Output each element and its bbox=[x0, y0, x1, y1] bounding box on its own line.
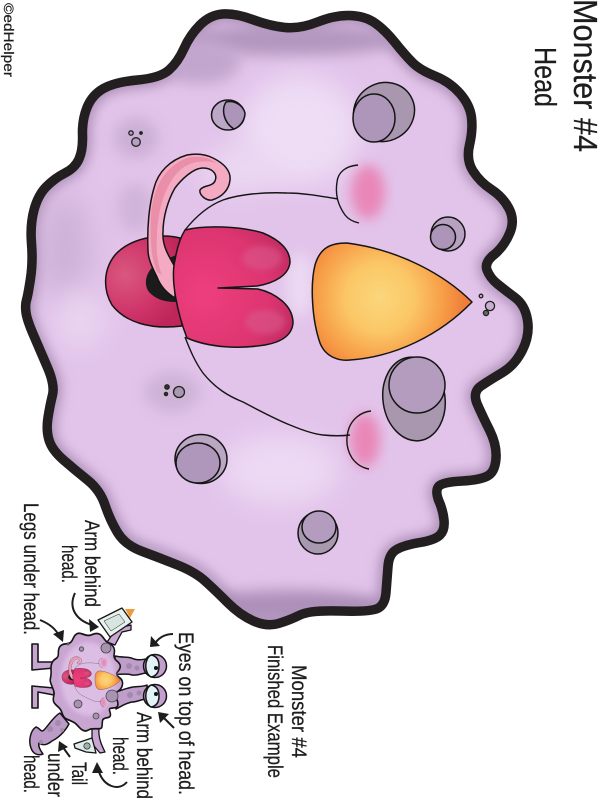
mini lower arm and bottle bbox=[74, 728, 105, 753]
mini spots on stalks bbox=[39, 663, 141, 744]
crater: top small bbox=[212, 100, 245, 130]
mini head bbox=[50, 633, 123, 731]
mini face bbox=[62, 657, 121, 707]
spots: lower left bbox=[164, 385, 184, 398]
arrow: to lower hand bbox=[92, 762, 127, 787]
mini upper arm and glue bottle bbox=[98, 608, 135, 645]
label: tail under head bbox=[19, 753, 90, 797]
crater: large right bbox=[377, 353, 451, 445]
face: lips, tail, nose, smile and cheeks bbox=[106, 154, 472, 469]
spots: near nose tip bbox=[479, 294, 495, 316]
subtitle: Head: Head bbox=[528, 47, 563, 107]
label: arm behind head, upper: head. bbox=[57, 545, 80, 583]
caption: finished example: Monster #4 bbox=[287, 665, 310, 758]
caption: finished example bbox=[263, 645, 310, 778]
mini eye stalks bbox=[115, 656, 147, 709]
arrow: to upper arm bbox=[72, 593, 99, 632]
head black outline bbox=[26, 14, 528, 625]
label: arm behind head, lower bbox=[108, 712, 155, 799]
mini legs bbox=[32, 644, 54, 708]
mini eyes bbox=[144, 654, 166, 708]
label: arm behind head, upper: Arm behind bbox=[80, 520, 103, 607]
copyright: ©edHelper bbox=[1, 3, 17, 77]
arrow: to tail bbox=[58, 741, 70, 757]
crater: lower left bbox=[175, 434, 227, 484]
arrow: to legs bbox=[40, 620, 64, 642]
crater: lower right bbox=[298, 511, 338, 554]
mini craters bbox=[67, 643, 118, 719]
arrow: to lower arm bbox=[158, 712, 174, 728]
label: arm behind head, upper bbox=[57, 520, 103, 607]
mini tail bbox=[30, 713, 69, 755]
label: tail under head: Tail bbox=[67, 762, 90, 785]
label: arm behind head, lower: head. bbox=[108, 737, 131, 775]
label: legs under head: Legs under head. bbox=[19, 503, 42, 635]
crater: right small bbox=[430, 217, 465, 251]
spots: upper left bbox=[129, 131, 142, 146]
crater: large top bbox=[343, 71, 425, 153]
arrow: to eyes bbox=[150, 634, 173, 647]
head body fill and shading bbox=[30, 18, 524, 620]
panel: monster head bbox=[20, 9, 533, 630]
finished example monster bbox=[30, 608, 166, 755]
